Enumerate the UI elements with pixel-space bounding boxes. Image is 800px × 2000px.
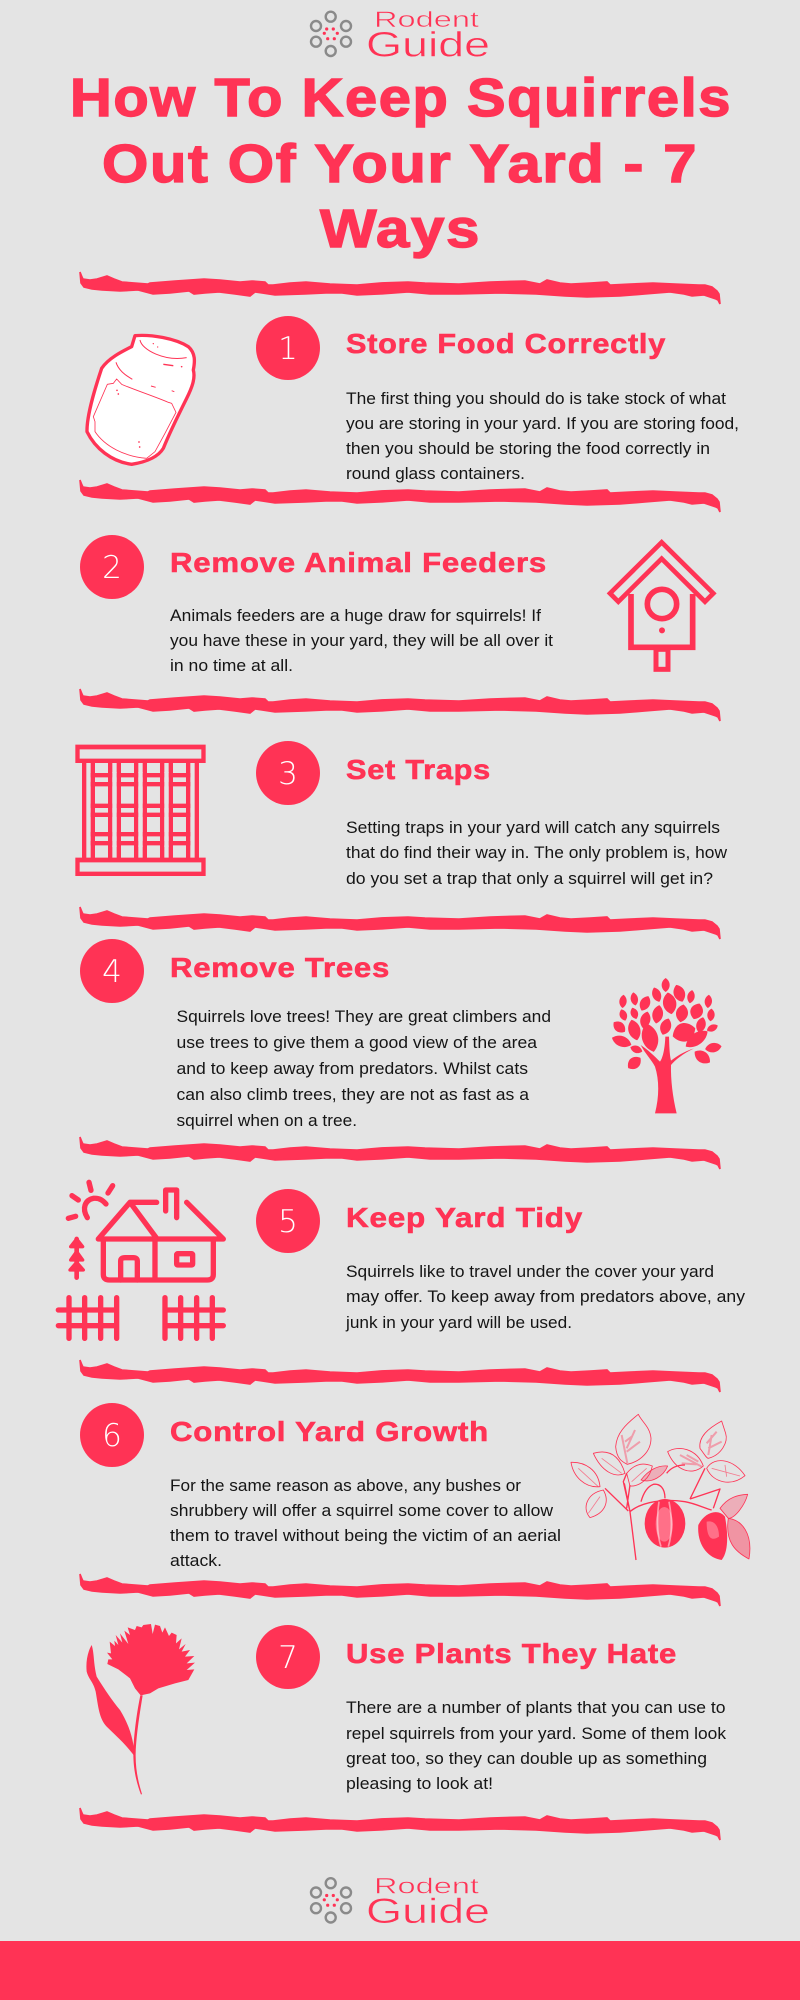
panel: step 6 control yard growth xyxy=(80,1403,750,1570)
panel: step 1 store food xyxy=(87,316,739,483)
body 4: use trees to give them a good view of the area xyxy=(176,1034,538,1052)
body 1: you are storing in your yard. If you are storing food, xyxy=(346,415,739,433)
number badge 1: 1 xyxy=(278,331,298,367)
body 3: do you set a trap that only a squirrel will get in? xyxy=(346,870,713,888)
icon: glass jar xyxy=(87,335,194,464)
heading 1: Store Food Correctly xyxy=(346,328,666,359)
icon: birdhouse xyxy=(610,542,713,669)
number badge 5 xyxy=(256,1189,320,1253)
body 4: squirrel when on a tree. xyxy=(176,1112,357,1130)
icon: house with fence xyxy=(58,1182,223,1338)
number badge 2: 2 xyxy=(102,550,122,586)
logo: header xyxy=(311,7,490,64)
logo: footer xyxy=(311,1874,490,1931)
body 3: that do find their way in. The only problem is, how xyxy=(346,844,727,862)
body 3 xyxy=(346,819,727,888)
logo: footer: Guide xyxy=(366,1892,490,1931)
title: Out Of Your Yard - 7 xyxy=(102,134,698,194)
body 7 xyxy=(346,1699,727,1793)
title: Ways xyxy=(320,199,481,259)
icon: leafy branch with fruit xyxy=(571,1414,750,1560)
heading 6: Control Yard Growth xyxy=(170,1416,489,1447)
icon: tree xyxy=(610,978,722,1113)
body 6 xyxy=(170,1477,561,1570)
body 6: them to travel without being the victim of an aerial xyxy=(170,1527,561,1545)
logo: header: Rodent xyxy=(374,7,479,32)
body 4: and to keep away from predators. Whilst cats xyxy=(176,1060,528,1078)
heading 2: Remove Animal Feeders xyxy=(170,547,547,578)
body 6: attack. xyxy=(170,1552,222,1570)
number badge 3 xyxy=(256,741,320,805)
body 7: There are a number of plants that you can use to xyxy=(346,1699,726,1717)
logo: header: Guide xyxy=(366,26,490,64)
number badge 6: 6 xyxy=(102,1418,122,1454)
body 2: in no time at all. xyxy=(170,657,293,675)
number badge 4 xyxy=(80,939,144,1003)
number badge 6 xyxy=(80,1403,144,1467)
body 7: great too, so they can double up as something xyxy=(346,1750,707,1768)
logo: footer: Rodent xyxy=(374,1874,479,1898)
body 6: For the same reason as above, any bushes or xyxy=(170,1477,522,1495)
number badge 2 xyxy=(80,535,144,599)
title xyxy=(70,68,732,259)
body 5 xyxy=(345,1263,746,1332)
panel: step 2 remove animal feeders xyxy=(80,535,713,675)
body 2: you have these in your yard, they will be all over it xyxy=(170,632,553,650)
title: How To Keep Squirrels xyxy=(70,68,732,128)
body 3: Setting traps in your yard will catch any squirrels xyxy=(346,819,720,837)
body 5: may offer. To keep away from predators above, any xyxy=(346,1288,746,1306)
panel: step 5 keep yard tidy xyxy=(58,1182,746,1338)
body 4 xyxy=(176,1008,551,1130)
body 5: junk in your yard will be used. xyxy=(345,1314,572,1332)
body 2 xyxy=(170,607,553,675)
number badge 5: 5 xyxy=(278,1204,298,1240)
body 1: round glass containers. xyxy=(346,465,525,483)
heading 7: Use Plants They Hate xyxy=(346,1638,677,1669)
footer bar xyxy=(0,1941,800,2000)
number badge 4: 4 xyxy=(102,954,122,990)
body 1 xyxy=(346,390,739,483)
number badge 7: 7 xyxy=(278,1640,298,1676)
body 5: Squirrels like to travel under the cover your yard xyxy=(346,1263,714,1281)
body 1: The first thing you should do is take stock of what xyxy=(346,390,726,408)
heading 5: Keep Yard Tidy xyxy=(346,1202,583,1233)
number badge 1 xyxy=(256,316,320,380)
body 4: can also climb trees, they are not as fast as a xyxy=(176,1086,530,1104)
number badge 3: 3 xyxy=(278,756,298,792)
body 6: shrubbery will offer a squirrel some cover to allow xyxy=(170,1502,553,1520)
body 7: pleasing to look at! xyxy=(346,1775,493,1793)
body 7: repel squirrels from your yard. Some of them look xyxy=(346,1725,727,1743)
body 2: Animals feeders are a huge draw for squirrels! If xyxy=(170,607,541,625)
panel: step 7 use plants they hate xyxy=(86,1624,727,1795)
number badge 7 xyxy=(256,1625,320,1689)
body 1: then you should be storing the food correctly in xyxy=(346,440,710,458)
panel: step 3 set traps xyxy=(75,741,727,888)
heading 3: Set Traps xyxy=(346,754,491,785)
body 4: Squirrels love trees! They are great climbers and xyxy=(176,1008,551,1026)
icon: flower silhouette xyxy=(86,1624,195,1795)
panel: step 4 remove trees xyxy=(80,939,722,1130)
icon: cage trap xyxy=(75,745,206,876)
heading 4: Remove Trees xyxy=(170,952,390,983)
